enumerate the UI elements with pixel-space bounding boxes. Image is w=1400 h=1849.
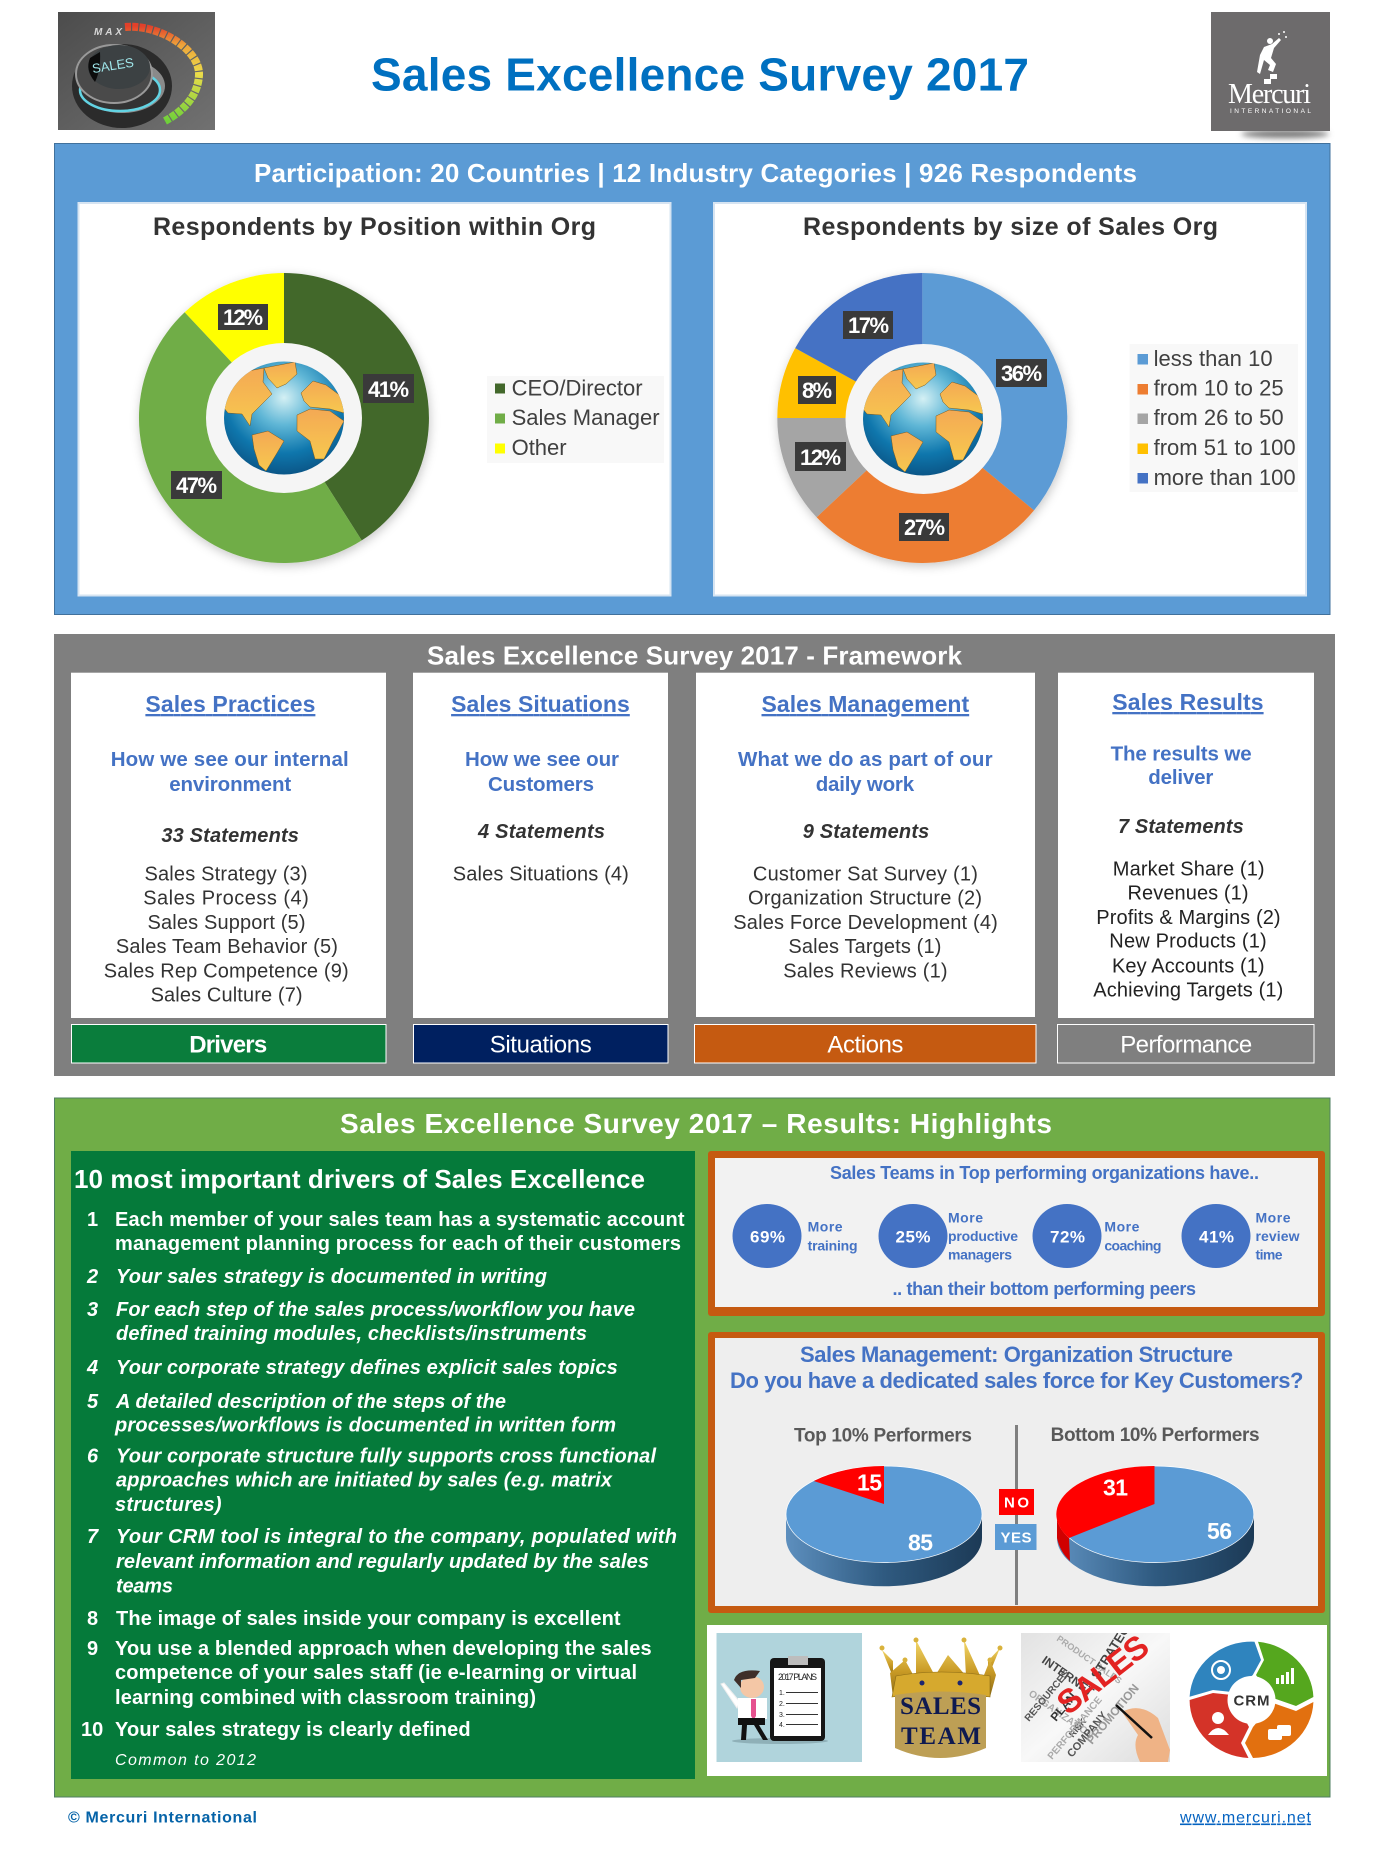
footer: copyright: © Mercuri International (68, 1810, 257, 1826)
column: sales management: Organization Structure (2) (748, 888, 982, 910)
stat: 69% (732, 1204, 858, 1268)
image: 2017 plans: 4. (779, 1722, 785, 1729)
column: sales practices: Sales Team Behavior (5) (116, 936, 338, 958)
bar: drivers (72, 1024, 386, 1063)
chart title: Respondents by size of Sales Org (803, 213, 1218, 241)
panel: top performers: .. than their bottom performing peers (892, 1279, 1196, 1299)
driver 5 (87, 1391, 616, 1437)
bar: performance (1058, 1024, 1314, 1063)
stat: 69%: 69% (750, 1228, 785, 1247)
bar: situations: Situations (490, 1032, 592, 1059)
image: sales word cloud (1021, 1633, 1170, 1762)
driver 5: A detailed description of the steps of the (115, 1391, 506, 1413)
column: sales practices: Sales Culture (7) (151, 985, 303, 1007)
legend: size: from 10 to 25 (1154, 376, 1284, 400)
image: sales word cloud: PROMOTION (1084, 1681, 1142, 1747)
stat: 69%: training (808, 1238, 858, 1254)
donut chart: size: 36% (1001, 361, 1042, 386)
stat: 72%: coaching (1104, 1238, 1161, 1254)
image: sales word cloud: STRATEGY (1088, 1614, 1138, 1682)
image: sales team crown: SALES (900, 1693, 981, 1720)
column: sales management: What we do as part of our (738, 748, 993, 771)
legend: size: more than 100 (1154, 465, 1296, 490)
question heading: Do you have a dedicated sales force for Key Customers? (730, 1368, 1304, 1393)
heading: participation: Participation: 20 Countries | 12 Industry Categories | 926 Respondents (254, 158, 1137, 188)
stat: 41%: time (1256, 1246, 1283, 1262)
heading: results highlights: Sales Excellence Survey 2017 – Results: Highlights (340, 1108, 1052, 1139)
driver 3: defined training modules, checklists/instruments (116, 1323, 587, 1345)
footer: website link: www.mercuri.net (1179, 1810, 1312, 1826)
legend: position: Other (512, 435, 567, 460)
column: sales results: 7 Statements (1118, 816, 1244, 838)
donut chart: position (139, 273, 429, 563)
logo: Mercuri International: INTERNATIONAL (1230, 108, 1311, 115)
legend: position (487, 376, 664, 463)
driver 9 (87, 1638, 652, 1709)
legend: size: less than 10 (1154, 346, 1273, 371)
column: sales management: Sales Reviews (1) (783, 961, 948, 983)
donut chart: size (777, 273, 1067, 563)
stat: 41% (1182, 1204, 1300, 1268)
image: sales word cloud: RESOURCES (1023, 1668, 1072, 1724)
stat: 72% (1032, 1204, 1161, 1268)
pie: bottom 10% performers: 31 (1103, 1475, 1128, 1501)
stat: 72%: 72% (1050, 1228, 1085, 1247)
driver 8: The image of sales inside your company is excellent (116, 1608, 621, 1630)
driver 9: You use a blended approach when developing the sales (115, 1638, 652, 1660)
image: 2017 plans: 2. (779, 1701, 785, 1708)
image: sales team crown (880, 1638, 1002, 1758)
subheading: 10 most important drivers of Sales Excellence (74, 1164, 645, 1194)
column: sales results: Key Accounts (1) (1112, 956, 1265, 978)
driver 6: approaches which are initiated by sales (e.g. matrix (116, 1470, 613, 1492)
image: sales word cloud: INTERNET (1039, 1653, 1097, 1699)
column: sales results: Achieving Targets (1) (1093, 980, 1283, 1002)
image: 2017 plans: 2017 PLANS (778, 1672, 817, 1682)
legend: no and yes: NO (1004, 1495, 1029, 1512)
column: sales results: Market Share (1) (1113, 859, 1265, 881)
driver 7 (87, 1526, 677, 1598)
image: 2017 plans: 1. (779, 1690, 785, 1697)
pie: bottom 10% performers: Bottom 10% Performers (1051, 1425, 1260, 1446)
driver 2: 2 (86, 1266, 98, 1288)
stat: 25%: 25% (896, 1228, 930, 1247)
driver 10: 10 (81, 1719, 103, 1741)
image: sales word cloud: PLAN (1048, 1690, 1079, 1724)
note: common to 2012: Common to 2012 (115, 1752, 256, 1769)
bar: performance: Performance (1120, 1032, 1252, 1059)
legend: no and yes (995, 1489, 1036, 1550)
column: sales practices: 33 Statements (161, 825, 299, 847)
column: sales management: Sales Targets (1) (788, 936, 941, 958)
bar: actions: Actions (827, 1032, 903, 1059)
image: 2017 plans: 3. (779, 1712, 785, 1719)
donut chart: position: 47% (176, 473, 217, 498)
pie: bottom 10% performers: 56 (1207, 1518, 1232, 1544)
logo: sales dial: SALES (91, 55, 135, 76)
column: sales management: daily work (816, 773, 915, 796)
title: Sales Excellence Survey 2017 (371, 48, 1029, 100)
column: sales situations: 4 Statements (477, 821, 605, 843)
driver 8: 8 (87, 1608, 98, 1630)
pie: bottom 10% performers (1051, 1425, 1260, 1586)
panel: images (707, 1614, 1327, 1776)
driver 6: structures) (115, 1494, 222, 1516)
image: CRM cycle (1190, 1642, 1313, 1758)
image: sales word cloud: RISK (1067, 1716, 1089, 1739)
stat: 72%: More (1104, 1219, 1140, 1235)
driver 7: Your CRM tool is integral to the company, populated with (116, 1526, 677, 1548)
driver 1: management planning process for each of their customers (115, 1233, 681, 1255)
logo: Mercuri International (1211, 12, 1330, 138)
driver 2: Your sales strategy is documented in writing (116, 1266, 547, 1288)
legend: size: from 51 to 100 (1154, 435, 1296, 460)
stat: 25%: More (948, 1210, 983, 1226)
legend: size: from 26 to 50 (1154, 405, 1284, 430)
column: sales practices (71, 673, 386, 1018)
driver 3: 3 (87, 1299, 98, 1321)
card: respondents by size (714, 203, 1306, 596)
stat: 69%: More (808, 1219, 843, 1235)
column: sales situations: Sales Situations (451, 691, 630, 717)
panel: top performers (708, 1151, 1325, 1316)
driver 9: 9 (87, 1638, 98, 1660)
chart title: Respondents by Position within Org (153, 213, 596, 241)
image: sales team crown: TEAM (901, 1723, 981, 1750)
donut chart: size: 27% (904, 515, 945, 540)
driver 7: teams (116, 1576, 173, 1598)
pie: top 10% performers: 15 (857, 1470, 882, 1496)
column: sales practices: Sales Strategy (3) (144, 864, 308, 886)
driver 5: processes/workflows is documented in written form (114, 1415, 616, 1437)
driver 9: learning combined with classroom training) (115, 1687, 536, 1709)
column: sales practices: environment (169, 773, 291, 796)
legend: size (1130, 344, 1298, 492)
driver 10: Your sales strategy is clearly defined (115, 1719, 471, 1741)
donut chart: size: 17% (848, 313, 889, 338)
column: sales management: Customer Sat Survey (1) (753, 864, 978, 886)
driver 4: 4 (86, 1357, 98, 1379)
driver 5: 5 (87, 1391, 99, 1413)
image: sales word cloud: PERFORMANCE (1046, 1695, 1105, 1762)
driver 4: Your corporate strategy defines explicit sales topics (116, 1357, 618, 1379)
bar: actions (694, 1024, 1036, 1063)
image: sales word cloud: PRODUCT SALES (1055, 1633, 1124, 1686)
column: sales practices: Sales Support (5) (148, 912, 306, 934)
divider (1015, 1425, 1018, 1605)
stat: 25% (878, 1204, 1018, 1268)
driver 3 (87, 1299, 635, 1345)
panel: results highlights (54, 1098, 1330, 1797)
column: sales results: The results we (1111, 743, 1252, 766)
pie: top 10% performers: Top 10% Performers (794, 1426, 972, 1447)
column: sales results: Sales Results (1112, 689, 1264, 715)
column: sales results: New Products (1) (1109, 931, 1267, 953)
legend: position: Sales Manager (512, 405, 660, 430)
column: sales practices: Sales Rep Competence (9) (104, 961, 349, 983)
column: sales situations: How we see our (465, 748, 619, 771)
driver 1 (87, 1209, 685, 1255)
stat: 41%: More (1256, 1210, 1291, 1226)
bar: drivers: Drivers (189, 1032, 267, 1059)
driver 7: 7 (87, 1526, 99, 1548)
image: sales word cloud: SALES (1050, 1627, 1156, 1722)
image: sales word cloud: COMPANY (1065, 1709, 1110, 1760)
panel: framework (54, 634, 1335, 1076)
image: sales word cloud: ORGANIZATION (1026, 1688, 1095, 1741)
column: sales practices: How we see our internal (111, 748, 349, 771)
donut chart: position: 12% (223, 305, 263, 330)
question heading: Sales Management: Organization Structure (800, 1342, 1233, 1367)
driver 7: relevant information and regularly updated by the sales (116, 1551, 649, 1573)
column: sales management: 9 Statements (803, 821, 929, 843)
heading: framework: Sales Excellence Survey 2017 - Framework (427, 640, 963, 670)
legend: no and yes: YES (1000, 1530, 1032, 1547)
logo: sales dial: MAX (94, 27, 123, 38)
column: sales results (1058, 673, 1314, 1018)
stat: 41%: review (1256, 1228, 1300, 1244)
driver 6 (87, 1446, 656, 1516)
donut chart: size: 12% (800, 445, 841, 470)
driver 9: competence of your sales staff (ie e-learning or virtual (115, 1662, 637, 1684)
panel: organization structure (708, 1332, 1325, 1613)
column: sales situations: Sales Situations (4) (453, 864, 629, 886)
driver 1: Each member of your sales team has a systematic account (115, 1209, 685, 1231)
card: respondents by position (78, 203, 670, 596)
column: sales management (696, 673, 1035, 1017)
panel: top performers: Sales Teams in Top performing organizations have.. (830, 1163, 1259, 1183)
driver 3: For each step of the sales process/workflow you have (116, 1299, 635, 1321)
logo: Mercuri International: Mercuri (1228, 79, 1311, 110)
column: sales management: Sales Management (762, 691, 970, 717)
column: sales results: deliver (1148, 766, 1213, 789)
bar: situations (414, 1024, 668, 1063)
pie: top 10% performers (786, 1426, 982, 1586)
stat: 41%: 41% (1199, 1228, 1234, 1247)
image: CRM cycle: CRM (1234, 1692, 1270, 1710)
column: sales results: Revenues (1) (1128, 883, 1248, 905)
driver 1: 1 (87, 1209, 98, 1231)
panel: participation (54, 144, 1330, 614)
column: sales management: Sales Force Development (4) (733, 912, 998, 934)
column: sales situations (413, 673, 668, 1018)
donut chart: position: 41% (368, 377, 409, 402)
column: sales results: Profits & Margins (2) (1096, 907, 1281, 929)
legend: position: CEO/Director (512, 376, 643, 400)
stat: 25%: productive (948, 1228, 1018, 1244)
driver 6: 6 (87, 1446, 99, 1468)
column: sales practices: Sales Process (4) (143, 888, 309, 910)
logo: sales dial (58, 12, 215, 130)
panel: 10 drivers (71, 1151, 695, 1779)
driver 6: Your corporate structure fully supports cross functional (116, 1446, 656, 1468)
column: sales practices: Sales Practices (145, 691, 315, 717)
image: 2017 plans (716, 1633, 862, 1762)
column: sales situations: Customers (488, 773, 594, 796)
stat: 25%: managers (948, 1246, 1012, 1262)
donut chart: size: 8% (802, 378, 832, 403)
question heading (730, 1342, 1304, 1393)
pie: top 10% performers: 85 (908, 1530, 933, 1556)
